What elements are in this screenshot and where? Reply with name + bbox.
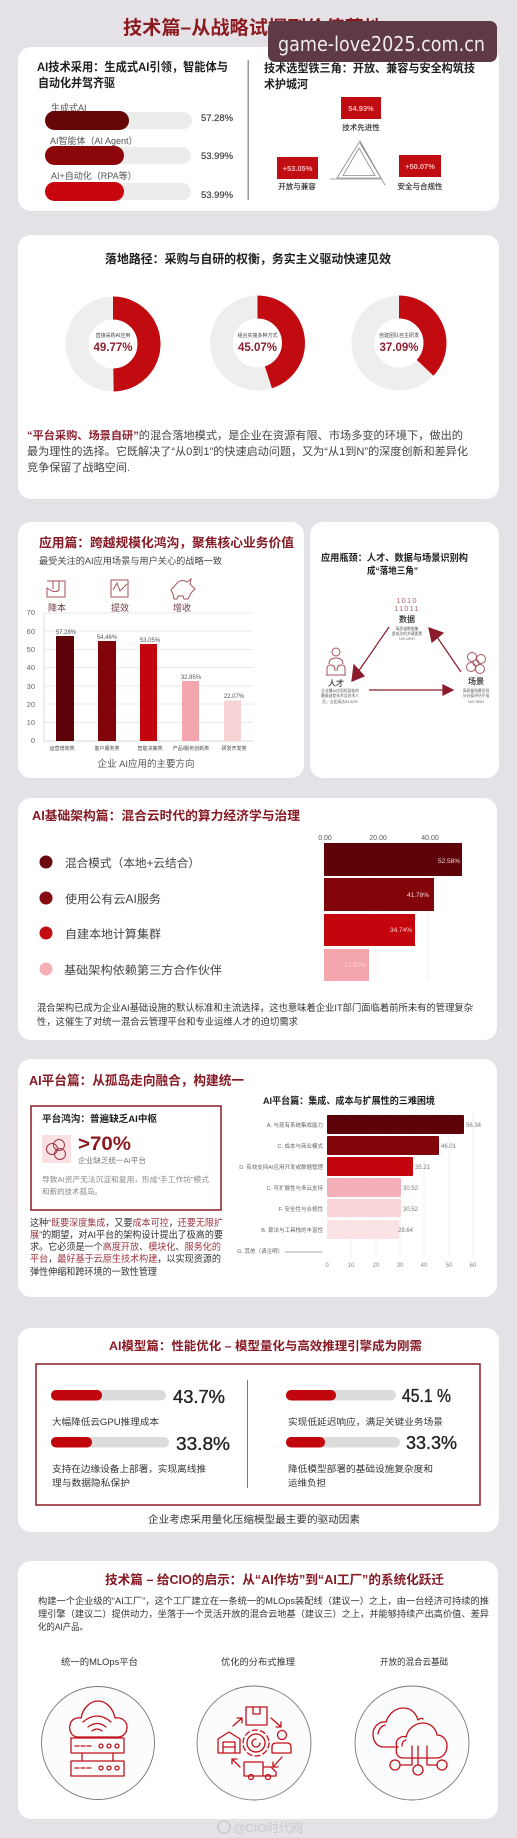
text block [37, 1002, 473, 1028]
icon: efficiency: 提效 [111, 602, 129, 613]
title: 技术篇–从战略试探到价值落地 [123, 16, 383, 39]
bar chart: 50 [27, 645, 35, 654]
node: data: 1010 [396, 596, 418, 605]
heading: technology iron triangle [264, 61, 475, 91]
bar chart: trilemma: 60 [470, 1263, 477, 1269]
text block [30, 1217, 223, 1278]
bar chart: 70 [27, 608, 35, 617]
node: scenario: 与价值评估不准 [463, 693, 489, 698]
heading: AI technology adoption: 自动化并驾齐驱 [38, 75, 115, 90]
triangle diagram: 开放与兼容 [278, 181, 316, 191]
stat: 43.7%: 43.7% [173, 1387, 225, 1407]
horizontal bar chart: 52.58% [438, 858, 460, 865]
node: scenario: 场景 [468, 677, 484, 686]
caption: 企业考虑采用量化压缩模型最主要的驱动因素 [148, 1513, 360, 1526]
bar chart: trilemma: C. 成本与商业模式 [277, 1142, 323, 1150]
bar chart: 智能决策类 [137, 745, 163, 752]
text block: 竞争保留了战略空间. [27, 460, 130, 474]
bar: generative AI [45, 102, 233, 130]
callout: platform gap: >70% [78, 1134, 131, 1155]
bar chart: 60 [27, 627, 35, 636]
callout: platform gap [31, 1106, 221, 1210]
legend list: 基础架构依赖第三方合作伙伴 [64, 963, 223, 977]
horizontal bar chart: 17.37% [344, 962, 366, 969]
triangle diagram: 技术先进性 [342, 122, 380, 132]
bar chart: trilemma: 30.52 [403, 1186, 419, 1192]
panel: CIO takeaways [18, 1561, 498, 1819]
text block: 构建一个企业级的“AI工厂”，这个工厂建立在一条统一的MLOps装配线（建议一）之上，由一台经济可持续的推 [38, 1595, 489, 1606]
label: hybrid cloud: 开放的混合云基础 [380, 1656, 448, 1667]
icon: cost reduction: 降本 [48, 602, 66, 613]
bar chart: trilemma: A. 与现有系统集成能力 [267, 1121, 323, 1129]
bar: generative AI: 生成式AI [51, 102, 87, 113]
bar chart: trilemma: B. 算法与工具栈的丰富性 [261, 1226, 323, 1234]
stat: 45.1%: 45.1 % [402, 1386, 451, 1406]
bar chart: trilemma: 35.21 [415, 1165, 431, 1171]
icon: efficiency [111, 580, 129, 613]
heading: AI technology adoption: AI技术采用：生成式AI引领，智能体与 [37, 59, 228, 74]
donut: in-house: 自建团队自主研发 [379, 332, 419, 339]
bar chart: trilemma: 28.64 [398, 1228, 414, 1234]
icon: hybrid cloud [355, 1686, 469, 1800]
panel: technology adoption [18, 47, 499, 211]
donut: combined approach [222, 307, 294, 379]
panel: landing path [18, 235, 499, 499]
horizontal bar chart [318, 835, 462, 981]
heading: 技术篇 – 给CIO的启示：从“AI作坊”到“AI工厂”的系统化跃迁 [105, 1572, 445, 1587]
horizontal bar chart: 40.00 [421, 835, 439, 842]
heading: technology iron triangle: 技术选型铁三角：开放、兼容与安全构筑技 [264, 61, 475, 75]
bar chart: 30 [27, 682, 35, 691]
panel: AI infrastructure [18, 798, 497, 1040]
bar chart: trilemma: 56.34 [466, 1123, 482, 1129]
bar chart: 产品/服务创新类 [173, 745, 209, 752]
callout: platform gap: 平台鸿沟：普遍缺乏AI中枢 [42, 1113, 157, 1125]
bar chart: 54.46% [97, 635, 118, 641]
node: scenario: （40.78%） [466, 699, 486, 704]
bar chart: 22.07% [224, 694, 245, 700]
stat: 33.8%: 理与数据隐私保护 [52, 1477, 130, 1488]
heading: 应用篇：跨越规模化鸿沟，聚焦核心业务价值 [39, 535, 294, 550]
node: talent: 最紧缺是技术及技术人 [321, 693, 359, 698]
donut: direct purchase: 49.77% [93, 342, 133, 354]
bar chart: trilemma: 40 [421, 1263, 428, 1269]
text block: 化的AI产品。 [38, 1621, 88, 1632]
text block: 展”的期望，对AI平台的架构设计提出了极高的要 [30, 1229, 223, 1241]
bar chart: trilemma [237, 1112, 482, 1269]
bar chart: 客户服务类 [94, 745, 120, 752]
panel: AI model [18, 1328, 499, 1532]
node: talent: 员，占比高达53.52% [322, 699, 358, 704]
stat: 43.7% [51, 1387, 225, 1427]
text block: 平台，最好基于云原生技术构建，以实现资源的 [30, 1253, 221, 1265]
arrow: data to talent [352, 627, 389, 681]
heading: AI平台篇：从孤岛走向融合，构建统一 [29, 1073, 244, 1088]
triangle diagram: +53.05% [283, 164, 313, 173]
bar chart: trilemma: G. 其他（请注明） [237, 1247, 283, 1255]
bar: AI automation: AI+自动化（RPA等） [51, 170, 137, 181]
bar chart: trilemma: C. 可扩展性与多云支持 [266, 1184, 323, 1192]
heading: 应用瓶颈：人才、数据与场景识别构 [321, 552, 468, 564]
bar chart: trilemma: F. 安全性与合规性 [279, 1205, 323, 1213]
bar chart: 10 [27, 718, 35, 727]
text block: 弹性伸缩和跨环境的一致性管理 [30, 1266, 157, 1278]
bar: generative AI: 57.28% [201, 113, 233, 123]
horizontal bar chart: 34.74% [390, 927, 412, 934]
text block: 最为理性的选择。它既解决了“从0到1”的快速启动问题，又为“从1到N”的深度创新和差异化 [27, 444, 468, 458]
node: data: 高质量数据集 [396, 626, 419, 631]
subheading: 最受关注的AI应用场景与用户关心的战略一致 [39, 555, 222, 566]
node: data: （40.19%） [397, 636, 417, 641]
bar chart: trilemma: 0 [325, 1263, 329, 1269]
stat: 33.8%: 支持在边缘设备上部署，实现离线推 [52, 1463, 206, 1474]
stat: 33.8%: 33.8% [176, 1434, 230, 1454]
node: data: 11011 [394, 604, 420, 613]
bar chart: trilemma: 10 [348, 1263, 355, 1269]
horizontal bar chart: 0.00 [318, 835, 332, 842]
bar chart: trilemma: 20 [373, 1263, 380, 1269]
bar chart: trilemma: 50 [446, 1263, 453, 1269]
node: data [392, 596, 422, 641]
callout: platform gap: 和新的技术孤岛。 [42, 1186, 102, 1196]
horizontal bar chart: 41.78% [407, 892, 429, 899]
stat: 33.3%: 运维负担 [288, 1477, 326, 1488]
legend list: 混合模式（本地+云结合） [65, 856, 200, 870]
icon: cloud server [42, 1686, 154, 1800]
node: talent [321, 648, 359, 704]
icon: distributed cycle [197, 1686, 311, 1800]
icon: piggy bank: 增收 [173, 602, 191, 613]
bar chart: 40 [27, 663, 35, 672]
stat: 43.7%: 大幅降低云GPU推理成本 [52, 1416, 159, 1427]
icon: cost reduction [47, 581, 66, 613]
text block: 这种“既要深度集成，又要成本可控，还要无限扩 [30, 1217, 223, 1229]
horizontal bar chart: 20.00 [369, 835, 387, 842]
heading: AI technology adoption [37, 59, 228, 90]
watermark: site badge [268, 21, 497, 62]
node: data: 是成功的关键要素 [392, 631, 422, 636]
callout: platform gap: 企业缺乏统一AI平台 [78, 1155, 146, 1165]
bar chart: 运营增效类 [49, 745, 75, 752]
node: scenario [463, 652, 489, 704]
bar chart: 32.85% [181, 675, 202, 681]
stat: 33.3%: 33.3% [406, 1433, 457, 1453]
bar: AI automation: 53.99% [201, 190, 233, 200]
stat: 33.3%: 降低模型部署的基础设施复杂度和 [288, 1463, 433, 1474]
stat: 45.1%: 实现低延迟响应，满足关键业务场景 [288, 1416, 443, 1427]
legend list [40, 856, 223, 977]
heading: technology iron triangle: 术护城河 [264, 77, 308, 91]
node: talent: 人才 [328, 678, 344, 688]
stat: 33.8% [51, 1434, 230, 1488]
legend list: 自建本地计算集群 [65, 927, 162, 941]
icon: piggy bank [171, 579, 195, 613]
triangle diagram [277, 97, 443, 191]
chart heading: AI平台篇：集成、成本与扩展性的三难困境 [263, 1095, 435, 1107]
bar chart: 0 [31, 736, 35, 745]
bar: AI agent: AI智能体（AI Agent） [50, 135, 138, 146]
stat: 45.1% [286, 1386, 451, 1427]
donut: direct purchase: 直接采购AI应用 [96, 332, 130, 339]
triangle diagram: +50.07% [405, 162, 435, 171]
panel: AI platform [18, 1059, 497, 1297]
bar chart: trilemma: 46.01 [441, 1144, 457, 1150]
bar chart: 53.05% [140, 638, 161, 644]
bar chart: 研发开发类 [221, 745, 247, 752]
donut: combined approach: 45.07% [238, 342, 277, 354]
donut: direct purchase [77, 308, 149, 380]
arrow: scenario to data [429, 628, 461, 672]
node: talent: 企业最AI应用时面临的 [321, 688, 359, 693]
heading: AI基础架构篇：混合云时代的算力经济学与治理 [32, 808, 300, 823]
watermark: weibo: @CIO时代网 [233, 1821, 303, 1835]
triangle diagram: 安全与合规性 [398, 181, 443, 191]
triangle diagram: 54.93% [348, 104, 374, 113]
stat: 33.3% [286, 1433, 457, 1488]
node: scenario: 高质量场景识别 [463, 688, 489, 693]
bar chart: trilemma: 30 [397, 1263, 404, 1269]
text block: 理引擎（建议二）提供动力，坐落于一个灵活开放的混合云地基（建议三）之上，并能够持续产出高价值、差异 [38, 1608, 489, 1619]
bar chart: trilemma: 30.52 [403, 1207, 419, 1213]
text block [27, 428, 468, 474]
text block: 混合架构已成为企业AI基础设施的默认标准和主流选择，这也意味着企业IT部门面临着前所未有的管理复杂 [37, 1002, 473, 1014]
chart caption: 企业 AI应用的主要方向 [97, 758, 195, 770]
arrow: talent to scenario [369, 685, 453, 695]
label: inference: 优化的分布式推理 [221, 1656, 295, 1667]
panel: applications [18, 522, 304, 778]
bar: AI agent: 53.99% [201, 151, 233, 161]
donut: combined approach: 组合实施多种方式 [237, 332, 278, 339]
bar chart [27, 608, 253, 752]
label: MLOps: 统一的MLOps平台 [61, 1656, 138, 1667]
donut: in-house [363, 307, 435, 379]
icon: overlapping circles [42, 1135, 71, 1163]
donut: in-house: 37.09% [379, 342, 419, 354]
bar chart: trilemma: D. 有效支持AI应用开发或数据管理 [239, 1163, 323, 1171]
heading: 成“落地三角” [367, 565, 418, 577]
panel: application bottlenecks [310, 522, 499, 778]
heading: 落地路径：采购与自研的权衡，务实主义驱动快速见效 [105, 251, 391, 266]
framed stats [36, 1364, 480, 1505]
text block [38, 1595, 489, 1632]
legend list: 使用公有云AI服务 [65, 892, 162, 906]
node: data: 数据 [399, 614, 415, 624]
watermark: site badge: game-love2025.com.cn [278, 32, 485, 56]
heading [321, 552, 468, 577]
text block: 性，这催生了对统一混合云管理平台和专业运维人才的迫切需求 [37, 1016, 298, 1028]
bar: AI automation [45, 170, 233, 201]
callout: platform gap: 导致AI资产无法沉淀和复用，形成“手工作坊”模式 [42, 1174, 210, 1184]
text block: “平台采购、场景自研”的混合落地模式，是企业在资源有限、市场多变的环境下，做出的 [27, 428, 463, 442]
bar chart: 20 [27, 700, 35, 709]
text block: 求。它必须是一个高度开放、模块化、服务化的 [30, 1241, 221, 1253]
bar: AI agent [45, 135, 233, 165]
bar chart: 57.28% [56, 630, 77, 636]
heading: AI模型篇：性能优化 – 模型量化与高效推理引擎成为刚需 [109, 1338, 422, 1353]
